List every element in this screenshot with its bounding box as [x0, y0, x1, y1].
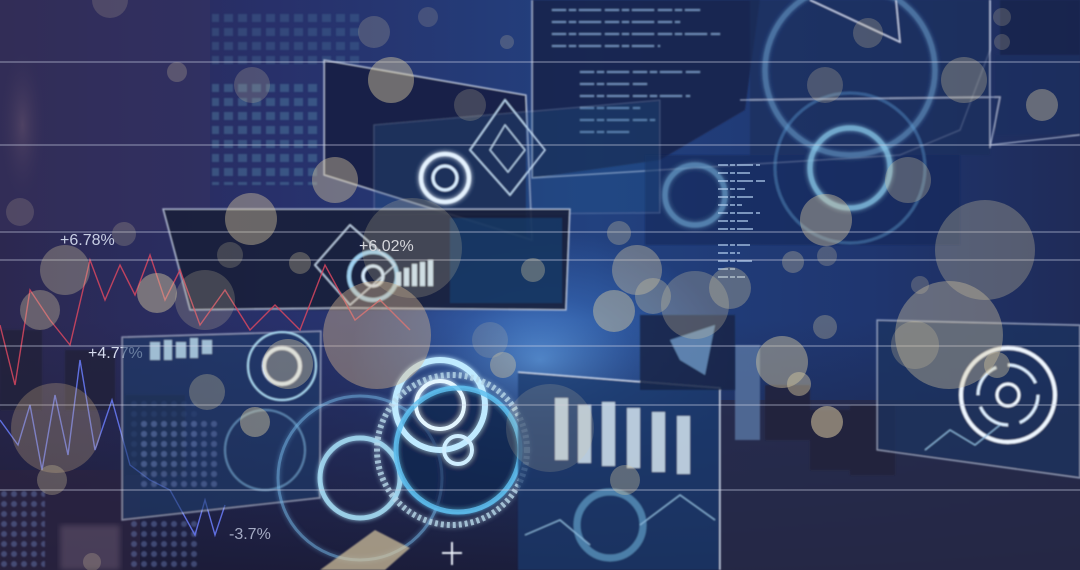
panel: bar chart screen	[518, 315, 735, 570]
panel: middle screen	[163, 209, 570, 310]
panel: top right code screen	[532, 0, 990, 178]
chart: left red line	[0, 255, 410, 385]
label: -3.7%: -3.7%	[229, 526, 271, 543]
chart: left blue line	[0, 360, 225, 535]
icon: central glowing gears	[278, 360, 527, 560]
bottom centre shape	[320, 530, 462, 570]
panel: lower left gauges	[122, 331, 321, 520]
square grid top centre	[0, 8, 362, 570]
label: +6.02%: +6.02%	[359, 238, 414, 255]
label: +4.77%: +4.77%	[88, 345, 143, 362]
label: +6.78%: +6.78%	[60, 232, 115, 249]
horizontal scan lines	[0, 62, 1080, 490]
panel: top right dial	[645, 0, 1080, 245]
panel: right gauge screen	[877, 320, 1080, 478]
dark city silhouette bars	[0, 330, 895, 475]
code column	[718, 165, 765, 277]
panel: upper centre screen	[324, 60, 660, 240]
